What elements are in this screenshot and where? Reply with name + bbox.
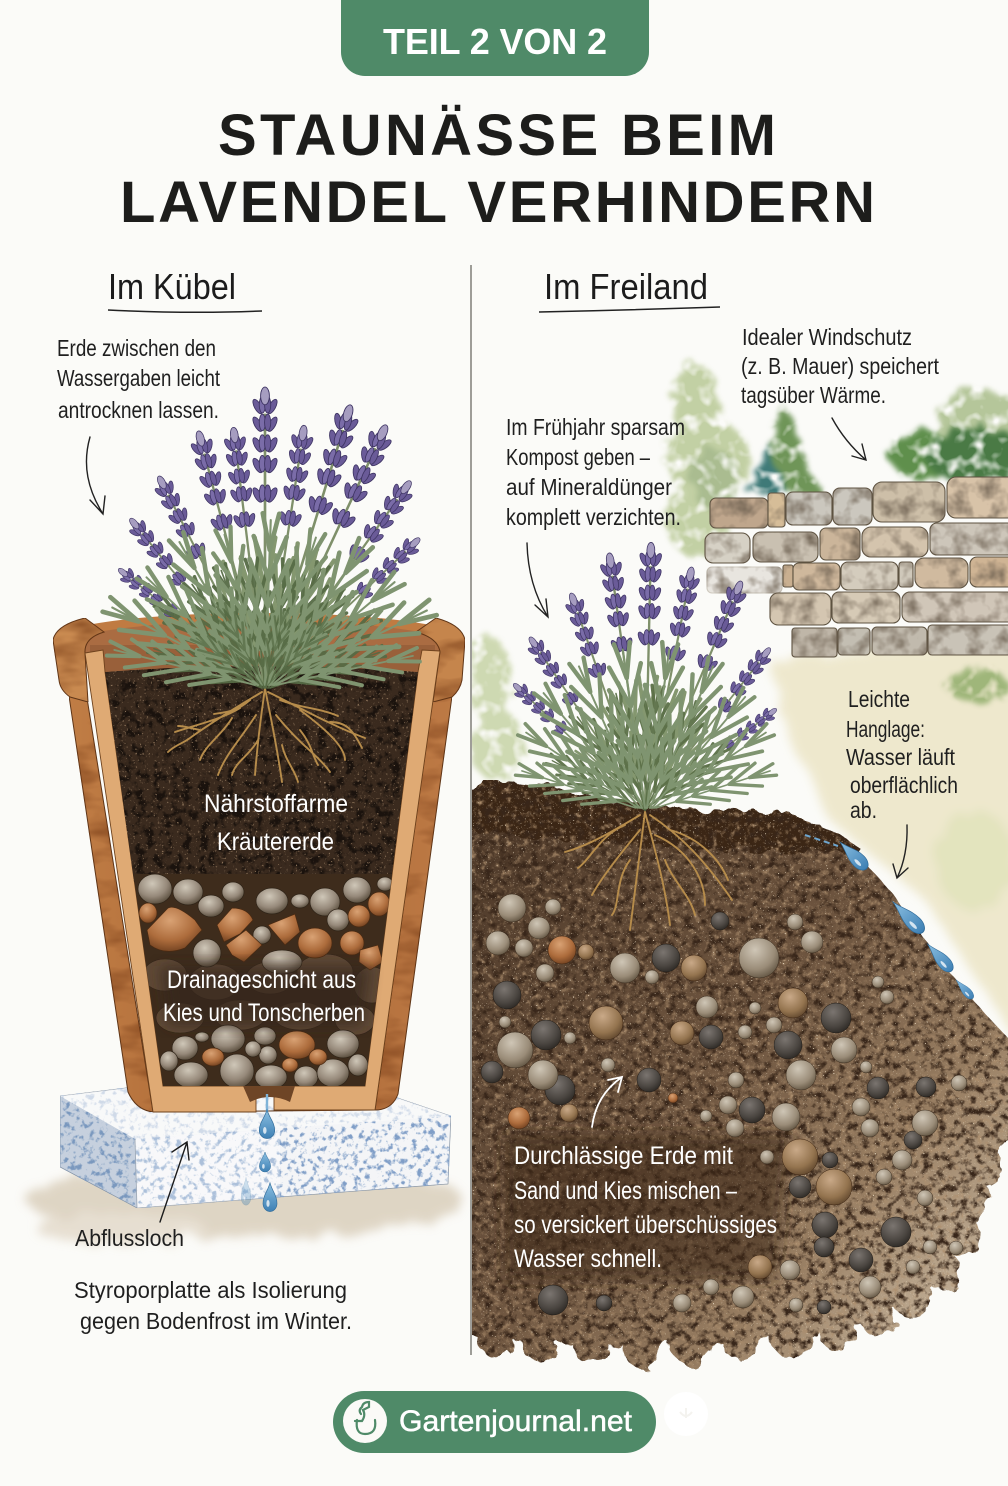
terracotta shards	[139, 892, 390, 1072]
note: styrofoam insulation: gegen Bodenfrost im Winter.	[80, 1308, 352, 1334]
flower spikes	[113, 387, 427, 693]
note: compost: komplett verzichten.	[506, 504, 681, 530]
styrofoam slab	[60, 1085, 451, 1208]
note: permeable soil	[514, 1142, 777, 1273]
pot rim, front halves	[53, 618, 465, 702]
icon: plant in bowl	[343, 1399, 387, 1443]
note: watering: antrocknen lassen.	[58, 397, 219, 423]
footer badge: Gartenjournal.net	[333, 1391, 656, 1453]
arrow: compost to plant	[527, 543, 548, 617]
arrow: drain hole	[160, 1142, 189, 1222]
drainage layer	[130, 874, 396, 1089]
label: drainage layer	[160, 966, 370, 1027]
water running off slope	[805, 835, 976, 1001]
note: watering: Erde zwischen den	[57, 335, 216, 361]
note: wind shelter: Idealer Windschutz	[742, 324, 912, 350]
heading: Im Kübel: Im Kübel	[108, 266, 236, 307]
label: drainage layer: Kies und Tonscherben	[163, 999, 365, 1027]
note: compost: Im Frühjahr sparsam	[506, 414, 685, 440]
top tab: part indicator	[341, 0, 649, 76]
foliage	[542, 684, 739, 822]
label: potting soil	[204, 790, 348, 856]
ground shadow	[27, 1162, 463, 1244]
note: compost: auf Mineraldünger	[506, 474, 672, 500]
roots	[168, 688, 365, 782]
label: potting soil: Kräutererde	[217, 828, 334, 856]
soil slope	[465, 782, 1008, 1366]
flower spikes	[507, 542, 781, 815]
note: slope	[846, 686, 958, 823]
stone wall	[705, 477, 1008, 657]
label: Abflussloch: Abflussloch	[75, 1225, 184, 1251]
brown pebbles	[508, 936, 852, 1279]
muted stones behind label	[143, 954, 390, 1035]
water drops	[241, 1094, 277, 1212]
note: compost	[506, 414, 685, 530]
foliage	[144, 557, 388, 702]
dark pebbles	[481, 912, 936, 1315]
note: watering	[57, 335, 220, 423]
title	[120, 103, 875, 235]
note: slope: Hanglage:	[846, 716, 925, 742]
grey and tan pebbles	[486, 894, 967, 1312]
note: styrofoam insulation	[74, 1277, 352, 1334]
note: permeable soil: Wasser schnell.	[514, 1245, 662, 1273]
cut wall faces	[85, 650, 440, 1112]
bottom drain notch	[243, 1086, 295, 1102]
note: slope: Wasser läuft	[846, 744, 956, 770]
soil body with lumpy lower edge	[465, 812, 1008, 1366]
title: STAUNÄSSE BEIM	[218, 103, 776, 168]
note: permeable soil: Sand und Kies mischen –	[514, 1177, 737, 1205]
title: LAVENDEL VERHINDERN	[120, 170, 875, 235]
dark patch behind soil note	[505, 1135, 790, 1280]
panel: Im Kübel	[27, 266, 465, 1334]
hedge behind wall	[889, 389, 1008, 483]
pot body	[69, 696, 452, 1112]
pale tree	[666, 364, 750, 558]
arrow: wind shelter to wall	[832, 418, 866, 460]
terracotta pot, cross-section	[53, 613, 465, 1112]
potting soil	[105, 666, 418, 882]
grey gravel	[138, 874, 393, 1089]
note: permeable soil: so versickert überschüssiges	[514, 1211, 777, 1239]
note: compost: Kompost geben –	[506, 444, 650, 470]
note: slope: oberflächlich	[850, 772, 958, 798]
background trees	[470, 364, 1008, 781]
arrow: soil note upward	[592, 1077, 622, 1127]
sandy ground	[770, 640, 1008, 1045]
grass tuft	[947, 667, 1007, 703]
note: wind shelter: (z. B. Mauer) speichert	[741, 353, 940, 379]
heading: Im Freiland: Im Freiland	[544, 266, 708, 307]
pot rim, back	[53, 613, 465, 675]
roots	[565, 812, 732, 930]
panel: Im Freiland	[465, 266, 1008, 1366]
label: potting soil: Nährstoffarme	[204, 790, 348, 818]
note: slope: ab.	[850, 797, 877, 823]
arrow: watering note to plant	[86, 437, 105, 514]
note: permeable soil: Durchlässige Erde mit	[514, 1142, 733, 1170]
lavender plant in ground	[507, 542, 781, 823]
top tab: part indicator: TEIL 2 VON 2	[383, 21, 607, 62]
faint round mark	[664, 1392, 708, 1436]
note: styrofoam insulation: Styroporplatte als Isolierung	[74, 1277, 347, 1303]
label: drainage layer: Drainageschicht aus	[167, 966, 356, 994]
left bush	[470, 635, 523, 781]
note: wind shelter: tagsüber Wärme.	[741, 382, 886, 408]
arrow: slope note to water	[893, 825, 908, 878]
surface mulch	[465, 782, 862, 852]
lavender plant in pot	[96, 387, 443, 705]
note: watering: Wassergaben leicht	[57, 365, 220, 391]
footer badge: Gartenjournal.net: Gartenjournal.net	[399, 1405, 633, 1438]
note: wind shelter	[741, 324, 940, 408]
note: slope: Leichte	[848, 686, 910, 712]
teal cypress	[748, 405, 822, 495]
